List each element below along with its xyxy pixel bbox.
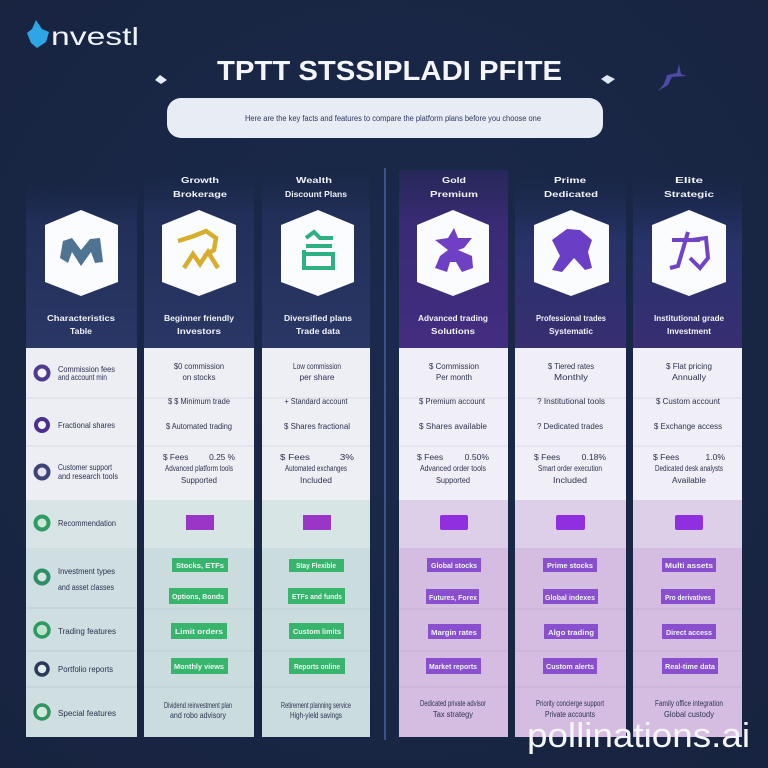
purple feature badges: Multi assets: [665, 561, 713, 570]
column header: Trade data: [296, 326, 340, 336]
icon: left diamond: [155, 75, 167, 84]
cell text: $ Shares fractional: [284, 422, 350, 431]
cell text: $ Fees 0.18%: [534, 453, 606, 462]
cell text: [534, 362, 606, 485]
purple feature badges: Algo trading: [548, 628, 594, 637]
green feature badges: ETFs and funds: [292, 592, 342, 601]
cell text: $ Premium account: [419, 397, 486, 406]
icon: row 2: [36, 419, 48, 431]
cell text: [417, 362, 489, 485]
icon: row 3: [36, 466, 48, 478]
cell text: $ Tiered rates: [548, 362, 594, 371]
recommendation marker: [303, 515, 331, 530]
row label 8: Special features: [58, 709, 116, 718]
column header: [262, 170, 370, 348]
column header: Brokerage: [173, 189, 227, 199]
column header: Professional trades: [536, 313, 606, 323]
column header: Strategic: [664, 189, 714, 199]
panel: platform column 2: [262, 170, 370, 737]
cell text: [653, 362, 725, 485]
icon: purple mark: [670, 232, 708, 268]
logo: [27, 20, 139, 51]
column header: Investment: [667, 326, 711, 336]
cell text: ? Dedicated trades: [537, 422, 603, 431]
cell text: $ Flat pricing: [666, 362, 712, 371]
special features text: [281, 701, 351, 720]
row label 2: Fractional shares: [58, 421, 115, 430]
purple feature badges: Prime stocks: [547, 561, 593, 570]
column header: Advanced trading: [418, 313, 488, 323]
green feature badges: [169, 558, 228, 674]
cell text: Smart order execution: [538, 464, 602, 473]
icon: M mark: [60, 238, 103, 266]
column header: [399, 170, 508, 348]
row label 5: and asset classes: [58, 583, 114, 592]
cell text: Included: [553, 476, 587, 485]
green feature badges: Options, Bonds: [172, 592, 224, 601]
title: TPTT STSSIPLADI PFITE: [217, 55, 562, 86]
icon: lightning spark: [658, 64, 687, 91]
column header: Institutional grade: [654, 313, 724, 323]
panel: platform column 5: [633, 170, 742, 737]
purple feature badges: Pro derivatives: [665, 593, 711, 602]
special features text: [536, 699, 605, 719]
cell text: $ Fees 1.0%: [653, 453, 725, 462]
purple feature badges: [426, 558, 481, 674]
row label 1: Commission fees: [58, 365, 115, 374]
column header: Discount Plans: [285, 189, 347, 199]
row backgrounds: [262, 348, 370, 737]
column header: Diversified plans: [284, 313, 352, 323]
cell text: per share: [300, 373, 335, 382]
green feature badges: Limit orders: [175, 627, 223, 636]
column header: Solutions: [431, 326, 475, 336]
special features text: Retirement planning service: [281, 701, 351, 710]
column header: Beginner friendly: [164, 313, 234, 323]
special features text: [164, 701, 232, 720]
cell text: [280, 362, 354, 485]
subtitle pill: Here are the key facts and features to compare the platform plans before you choose one: [245, 114, 542, 123]
purple feature badges: Futures, Forex: [429, 593, 478, 602]
special features text: High-yield savings: [290, 711, 342, 720]
column header: [633, 170, 742, 348]
column header: Wealth: [296, 175, 332, 185]
special features text: and robo advisory: [170, 711, 226, 720]
cell text: $ Exchange access: [654, 422, 722, 431]
icon: row 7: [36, 663, 48, 675]
cell text: $ Commission: [429, 362, 479, 371]
icon: row 5: [36, 570, 48, 584]
icon: row 4: [36, 516, 48, 530]
panel: row labels column: [26, 180, 137, 737]
cell text: [163, 362, 235, 485]
subtitle pill: [167, 98, 603, 138]
purple feature badges: Market reports: [429, 662, 477, 671]
row label 3: Customer support: [58, 463, 113, 472]
row label 5: Investment types: [58, 567, 115, 576]
row label 6: Trading features: [58, 627, 116, 636]
purple feature badges: [661, 558, 718, 674]
purple feature badges: Global stocks: [431, 561, 477, 570]
purple feature badges: [543, 558, 598, 674]
cell text: Available: [672, 476, 707, 485]
green feature badges: Reports online: [294, 662, 340, 671]
cell text: + Standard account: [284, 397, 348, 406]
cell text: Annually: [672, 373, 706, 382]
icon: row 8: [35, 705, 49, 719]
column header: Premium: [430, 189, 479, 199]
purple feature badges: Direct access: [666, 628, 712, 637]
purple feature badges: Custom alerts: [546, 662, 594, 671]
cell text: Monthly: [554, 373, 588, 382]
icon: purple mark: [435, 228, 473, 272]
row label 7: Portfolio reports: [58, 665, 113, 674]
green feature badges: Stay Flexible: [296, 561, 336, 570]
cell text: $ $ Minimum trade: [168, 397, 231, 406]
panel: platform column 4: [515, 170, 626, 737]
column header: Characteristics: [47, 313, 115, 323]
column header: Prime: [554, 175, 586, 185]
icon: purple mark: [552, 229, 592, 272]
row label 1: and account min: [58, 373, 107, 382]
cell text: Advanced order tools: [420, 464, 486, 473]
special features text: Priority concierge support: [536, 699, 605, 708]
recommendation marker: [440, 515, 468, 530]
cell text: $ Fees 0.25 %: [163, 453, 235, 462]
icon: right diamond: [601, 75, 615, 84]
purple feature badges: Real-time data: [665, 662, 716, 671]
cell text: $ Custom account: [656, 397, 721, 406]
cell text: $ Fees 0.50%: [417, 453, 489, 462]
purple feature badges: Margin rates: [431, 628, 477, 637]
row backgrounds: [633, 348, 742, 737]
column header: Elite: [675, 175, 703, 185]
row backgrounds: [26, 348, 137, 737]
green feature badges: Stocks, ETFs: [176, 561, 224, 570]
cell text: Automated exchanges: [285, 464, 347, 473]
special features text: Dividend reinvestment plan: [164, 701, 232, 710]
column header: [26, 180, 137, 348]
row backgrounds: [399, 348, 508, 737]
recommendation marker: [675, 515, 703, 530]
icon: green mark: [304, 232, 333, 268]
column header: Growth: [181, 175, 219, 185]
cell text: ? Institutional tools: [537, 397, 605, 406]
green feature badges: Custom limits: [293, 627, 341, 636]
cell text: $ Fees 3%: [280, 453, 354, 462]
cell text: Advanced platform tools: [165, 464, 233, 473]
logo: nvestl: [51, 23, 139, 51]
column header: Dedicated: [544, 189, 598, 199]
special features text: Private accounts: [545, 710, 595, 719]
cell text: on stocks: [182, 373, 216, 382]
panel: platform column 3: [399, 170, 508, 737]
icon: row 1: [36, 366, 48, 380]
cell text: $0 commission: [174, 362, 224, 371]
green feature badges: Monthly views: [174, 662, 224, 671]
column header: Systematic: [549, 326, 593, 336]
center divider: [384, 168, 386, 740]
icon: logo gem: [27, 20, 49, 48]
column header: Gold: [442, 175, 466, 185]
recommendation marker: [186, 515, 214, 530]
panel: platform column 1: [144, 170, 254, 737]
cell text: $ Automated trading: [166, 422, 232, 431]
row backgrounds: [515, 348, 626, 737]
cell text: Per month: [436, 373, 472, 382]
special features text: Family office integration: [655, 699, 723, 708]
cell text: $ Shares available: [419, 422, 488, 431]
column header: [144, 170, 254, 348]
special features text: Dedicated private advisor: [420, 699, 486, 708]
special features text: Tax strategy: [433, 710, 473, 719]
cell text: Dedicated desk analysts: [655, 464, 723, 473]
cell text: Supported: [181, 476, 217, 485]
purple feature badges: Global indexes: [545, 593, 595, 602]
recommendation marker: [556, 515, 585, 530]
special features text: [655, 699, 723, 719]
column header: Table: [70, 326, 92, 336]
row label 4: Recommendation: [58, 519, 116, 528]
column header: Investors: [177, 326, 221, 336]
special features text: [420, 699, 486, 719]
row label 3: and research tools: [58, 472, 118, 481]
green feature badges: [288, 559, 345, 674]
cell text: Low commission: [293, 362, 341, 371]
watermark: pollinations.ai: [527, 717, 750, 755]
cell text: Supported: [436, 476, 470, 485]
row backgrounds: [144, 348, 254, 737]
special features text: Global custody: [664, 710, 714, 719]
column header: [515, 170, 626, 348]
icon: gold mark: [178, 231, 218, 268]
icon: row 6: [35, 623, 49, 637]
cell text: Included: [300, 476, 332, 485]
